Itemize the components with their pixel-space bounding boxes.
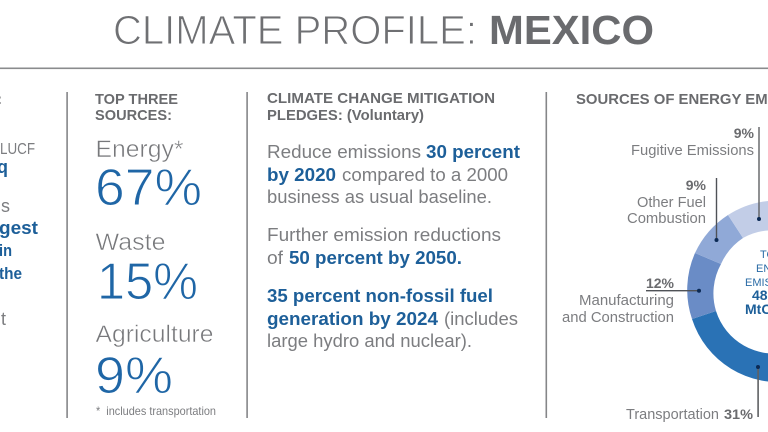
callout: fugitive emissions: Fugitive Emissions: [631, 142, 754, 159]
pledge: 50 percent by 2050: [267, 225, 501, 268]
callout: fugitive emissions: 9%: [734, 125, 755, 141]
stat: agriculture: Agriculture: [96, 321, 214, 348]
heading: mitigation pledges: [267, 90, 495, 124]
pledge: 50 percent by 2050: 50 percent by 2050.: [289, 248, 462, 268]
donut chart: [687, 200, 768, 382]
callout: manufacturing and construction: [562, 275, 701, 326]
callout: fugitive emissions: [631, 125, 761, 221]
pledge: 30 percent by 2020: [267, 142, 520, 207]
pledge: 30 percent by 2020: Reduce emissions: [267, 142, 421, 162]
panel: clipped left column: [0, 91, 38, 329]
callout: transportation: [626, 365, 760, 423]
stat: energy: [95, 136, 202, 217]
pledge: 30 percent by 2020: 30 percent: [426, 142, 520, 162]
footnote: * includes transportation: [96, 404, 216, 418]
heading: top three sources: TOP THREE: [95, 91, 178, 108]
callout: other fuel combustion: [627, 177, 718, 242]
callout: manufacturing and construction: and Construction: [562, 309, 674, 326]
pledge: 50 percent by 2050: Further emission reductions: [267, 225, 501, 245]
title: [113, 7, 654, 53]
callout: other fuel combustion: Combustion: [627, 210, 706, 227]
pledge: non-fossil generation: large hydro and nuclear).: [267, 331, 472, 351]
title: CLIMATE PROFILE:: [113, 7, 477, 53]
pledge: 50 percent by 2050: of: [267, 248, 284, 268]
pledge: non-fossil generation: generation by 2024: [267, 309, 438, 329]
title: MEXICO: [489, 7, 654, 53]
panel: sources of energy emissions: [562, 91, 768, 423]
callout: manufacturing and construction: 12%: [646, 275, 675, 291]
panel: clipped left column: s: [1, 196, 10, 216]
stat: energy: 67%: [95, 159, 202, 217]
stat: energy: Energy*: [96, 136, 184, 163]
donut centre label: [745, 249, 768, 317]
heading: top three sources: SOURCES:: [95, 107, 172, 124]
callout: transportation: Transportation: [626, 406, 719, 423]
pledge: 30 percent by 2020: compared to a 2000: [342, 165, 508, 185]
panel: clipped left column: gest: [0, 218, 38, 238]
pledge: 30 percent by 2020: business as usual baseline.: [267, 187, 492, 207]
pledge: non-fossil generation: 35 percent non-fossil fuel: [267, 286, 493, 306]
pledge: non-fossil generation: [267, 286, 518, 351]
heading: top three sources: [95, 91, 178, 124]
pledge: non-fossil generation: (includes: [444, 309, 518, 329]
callout: other fuel combustion: 9%: [686, 177, 707, 193]
panel: clipped left column: LUCF: [0, 141, 35, 158]
heading: mitigation pledges: PLEDGES: (Voluntary): [267, 107, 424, 124]
donut centre label: 48: [752, 287, 768, 303]
panel: mitigation pledges: [267, 90, 520, 351]
heading: mitigation pledges: CLIMATE CHANGE MITIGATION: [267, 90, 495, 107]
stat: waste: Waste: [96, 229, 166, 256]
callout: other fuel combustion: Other Fuel: [637, 194, 706, 211]
stat: waste: 15%: [97, 253, 198, 311]
panel: top three sources: [95, 91, 216, 418]
pledge: 30 percent by 2020: by 2020: [267, 165, 336, 185]
stat: agriculture: [95, 321, 214, 405]
callout: transportation: 31%: [724, 406, 754, 422]
stat: waste: [96, 229, 198, 311]
stat: agriculture: 9%: [95, 347, 173, 405]
panel: clipped left column: t: [1, 309, 6, 329]
callout: manufacturing and construction: Manufacturing: [579, 292, 674, 309]
